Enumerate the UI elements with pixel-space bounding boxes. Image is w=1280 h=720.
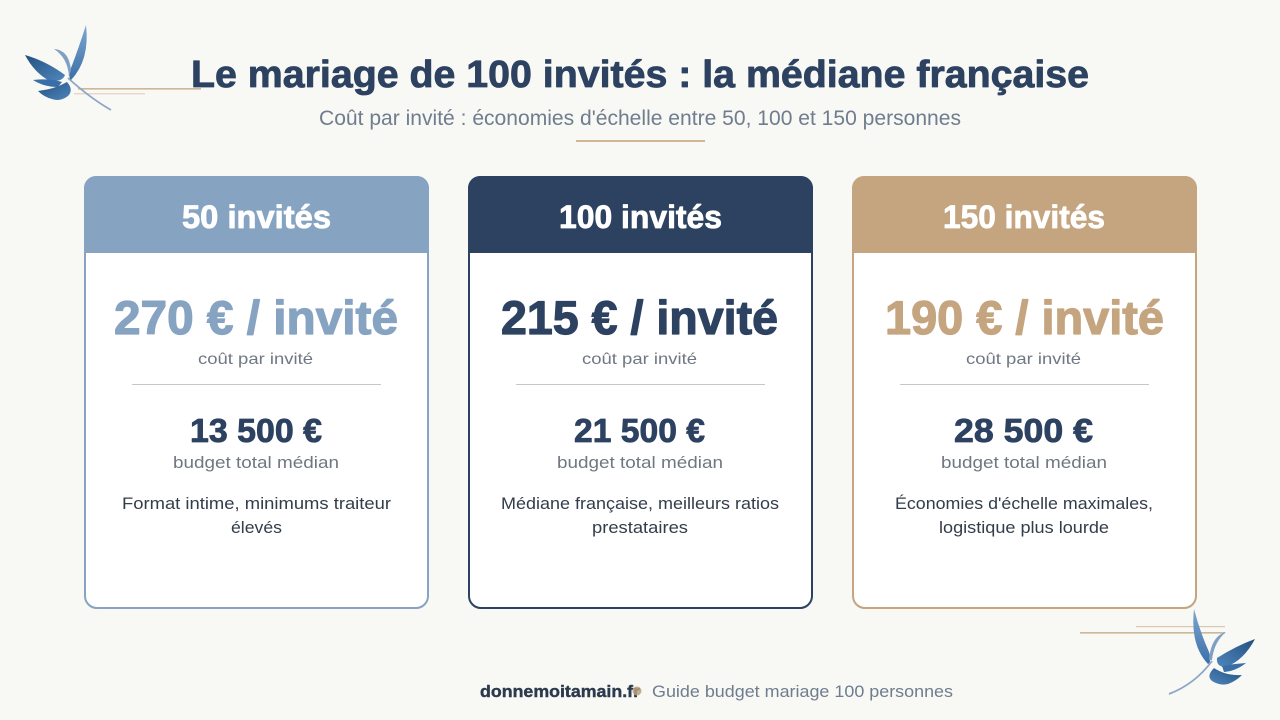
description (501, 495, 779, 537)
price caption: coût par invité (198, 351, 313, 368)
description (895, 494, 1153, 537)
panel header: 150 invités: 150 invités (943, 199, 1105, 235)
panel header: 100 invités: 100 invités (559, 199, 722, 235)
description: Médiane française, meilleurs ratios (501, 495, 779, 513)
total budget: 28 500 € (954, 413, 1093, 450)
icon: brand dot (632, 686, 642, 696)
panel: 150 invités (852, 176, 1197, 608)
icon: bottom-right leaf sprig with gold lines (1080, 609, 1255, 694)
icon: top-left leaf sprig with gold lines (25, 25, 201, 110)
panel header: 50 invités (84, 176, 429, 253)
description: logistique plus lourde (939, 519, 1109, 537)
description (122, 495, 392, 537)
description: prestataires (592, 519, 688, 537)
price per guest: 215 € / invité (501, 291, 778, 344)
panel: 50 invités (84, 176, 429, 608)
description: Économies d'échelle maximales, (895, 494, 1153, 513)
price caption: coût par invité (582, 351, 697, 368)
price per guest: 190 € / invité (885, 291, 1164, 344)
price caption: coût par invité (966, 351, 1081, 368)
title underline (576, 140, 705, 142)
panel header: 150 invités (852, 176, 1197, 253)
panel header: 100 invités (468, 176, 813, 253)
budget caption: budget total médian (941, 454, 1107, 472)
panel: 100 invités (468, 176, 813, 608)
budget caption: budget total médian (173, 454, 339, 472)
title: Le mariage de 100 invités : la médiane française (191, 54, 1089, 96)
description: élevés (231, 519, 282, 537)
budget caption: budget total médian (557, 454, 723, 472)
total budget: 21 500 € (574, 413, 705, 450)
footer brand: donnemoitamain.fr (480, 682, 640, 701)
description: Format intime, minimums traiteur (122, 495, 392, 513)
total budget: 13 500 € (190, 413, 322, 450)
panel header: 50 invités: 50 invités (182, 199, 331, 235)
footer note: Guide budget mariage 100 personnes (652, 683, 953, 701)
subtitle: Coût par invité : économies d'échelle entre 50, 100 et 150 personnes (319, 107, 961, 130)
footer (480, 682, 953, 701)
price per guest: 270 € / invité (114, 291, 398, 344)
